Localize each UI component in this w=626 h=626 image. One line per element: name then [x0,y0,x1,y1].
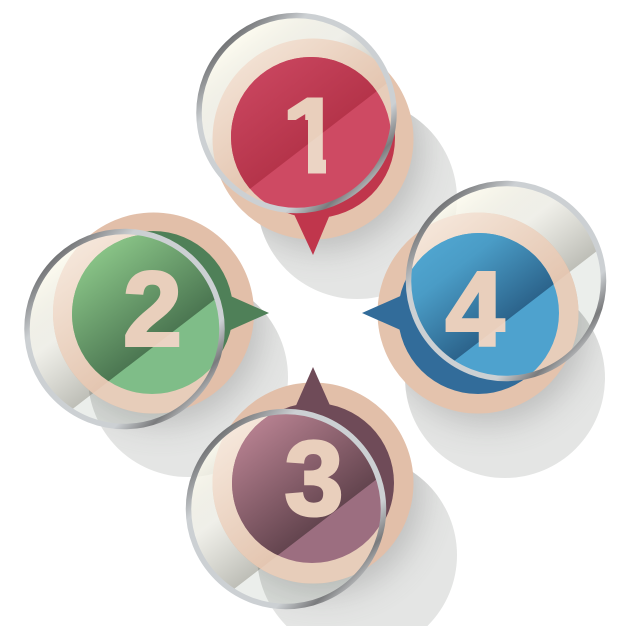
badge 4: blue, pointer left [362,171,616,414]
glass lens [24,228,225,430]
bubble face [231,57,391,217]
metal ring [408,184,604,378]
glass lens [406,180,606,382]
metal ring [27,232,222,426]
glass lens [196,12,397,214]
peach disc [378,212,578,414]
badge 3: mauve, pointer up [186,367,414,610]
number 1: 1 [282,77,341,195]
drop shadow: badge 2 [89,301,288,477]
badge 1: red, pointer down [186,3,414,255]
badge 2: green, pointer right [24,212,269,430]
peach disc [212,38,414,240]
number 3: 3 [285,420,343,538]
drop shadow: badge 1 [260,114,457,299]
number 4: 4 [446,250,505,368]
speech bubble with pointer [234,367,394,563]
bubble face [412,233,559,376]
speech bubble with pointer [362,234,558,394]
metal ring [199,16,394,210]
speech bubble with pointer [73,231,269,391]
speech bubble with pointer [235,58,395,255]
bubble face [72,234,232,394]
bubble face [232,416,381,563]
drop shadow: badge 3 [258,472,457,626]
metal ring [188,412,384,606]
peach disc [53,212,254,414]
drop shadow: badge 4 [405,310,605,478]
number 2: 2 [123,250,182,368]
peach disc [212,382,414,584]
glass lens [186,408,386,610]
